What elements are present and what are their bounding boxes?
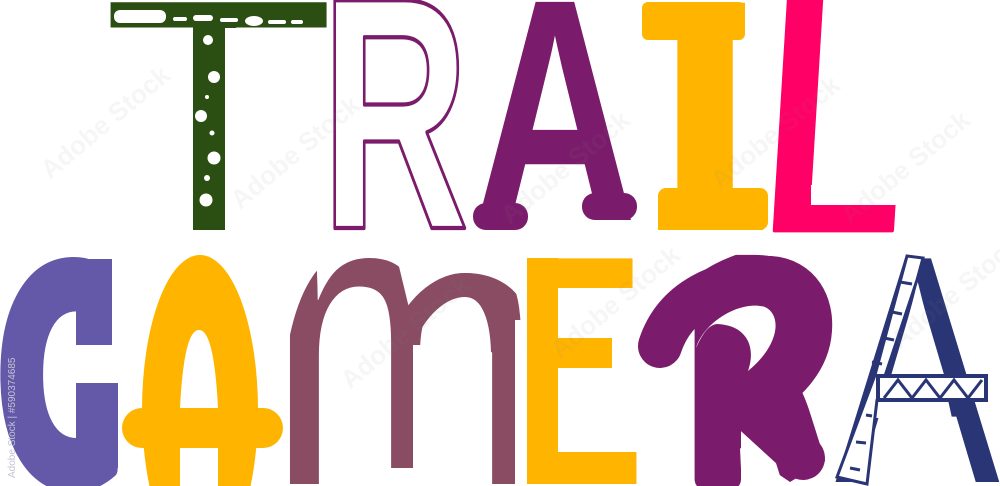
word: CAMERA: [0, 105, 1000, 486]
letter A, amber with rounded crossbar: [122, 220, 283, 486]
faint watermarks: Adobe Stock: [835, 104, 976, 230]
faint watermarks: Adobe Stock: [495, 104, 636, 230]
faint watermarks: Adobe Stock: [225, 89, 366, 215]
faint watermarks: Adobe Stock: [35, 59, 176, 185]
stock image id caption: Adobe Stock | #590374685: [7, 357, 18, 478]
faint watermarks: [35, 59, 1000, 395]
word: TRAIL: [102, 0, 918, 306]
faint watermarks: Adobe Stock: [335, 269, 476, 395]
faint watermarks: Adobe Stock: [705, 69, 846, 195]
faint watermarks: Adobe Stock: [545, 239, 686, 365]
